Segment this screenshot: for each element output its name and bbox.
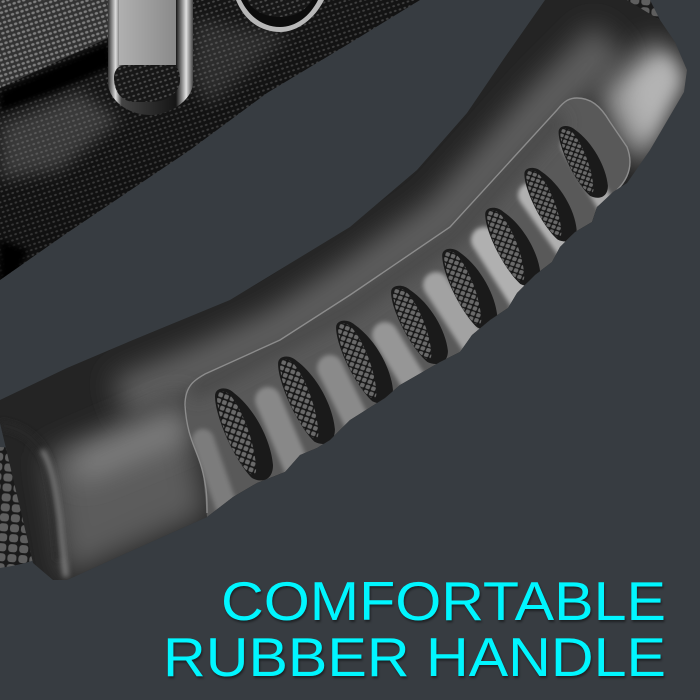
upper bag panel xyxy=(0,0,108,88)
icon: zipper pull xyxy=(108,0,193,115)
dark corner shadow xyxy=(0,240,28,285)
rib highlights xyxy=(203,145,612,505)
panel: grip inset xyxy=(186,99,630,517)
grip slots xyxy=(215,126,608,480)
right end cap core xyxy=(635,55,678,140)
title line 2: RUBBER HANDLE xyxy=(163,626,666,688)
rib 3 xyxy=(330,368,364,436)
rib 1 xyxy=(203,440,226,505)
pull light face xyxy=(119,0,176,65)
slot 5 xyxy=(442,249,497,330)
rib 2 xyxy=(268,400,298,470)
pull textured inset xyxy=(114,65,180,102)
rib 8 xyxy=(570,145,612,215)
right end cap highlight xyxy=(600,40,690,165)
left strap fabric xyxy=(0,447,51,568)
panel: textured bag body xyxy=(0,0,420,285)
left cylinder body xyxy=(45,395,207,578)
rib 5 xyxy=(436,285,486,362)
top-right strap fabric xyxy=(620,0,660,20)
rib 7 xyxy=(530,195,582,268)
grip base xyxy=(186,99,630,517)
groove line xyxy=(185,98,630,513)
slot 2 xyxy=(278,357,335,444)
rib 4 xyxy=(385,335,428,405)
rib 6 xyxy=(484,240,534,318)
slot 8 xyxy=(559,126,608,198)
ring inner shadow xyxy=(241,0,318,27)
lit fold highlight xyxy=(0,92,120,180)
left end rim xyxy=(42,456,63,560)
grip dark upper band xyxy=(190,115,560,392)
upper body mid tone xyxy=(120,40,610,400)
bag shading xyxy=(0,0,420,280)
left end highlight rim xyxy=(42,450,66,577)
chrome pull frame xyxy=(108,0,193,115)
title line 1: COMFORTABLE xyxy=(221,570,666,632)
right bag highlight xyxy=(193,20,282,102)
icon: zipper ring xyxy=(236,0,324,32)
slot 7 xyxy=(524,168,577,242)
title xyxy=(163,570,666,688)
dark fold shadow xyxy=(0,42,112,112)
ring inner texture xyxy=(247,0,312,17)
slot 3 xyxy=(336,321,393,403)
bag fabric texture xyxy=(0,0,420,285)
left cylinder highlight xyxy=(75,425,185,470)
ring frame xyxy=(236,0,324,32)
slot 4 xyxy=(391,286,448,364)
slot 1 xyxy=(215,388,273,480)
slot 6 xyxy=(485,208,540,286)
